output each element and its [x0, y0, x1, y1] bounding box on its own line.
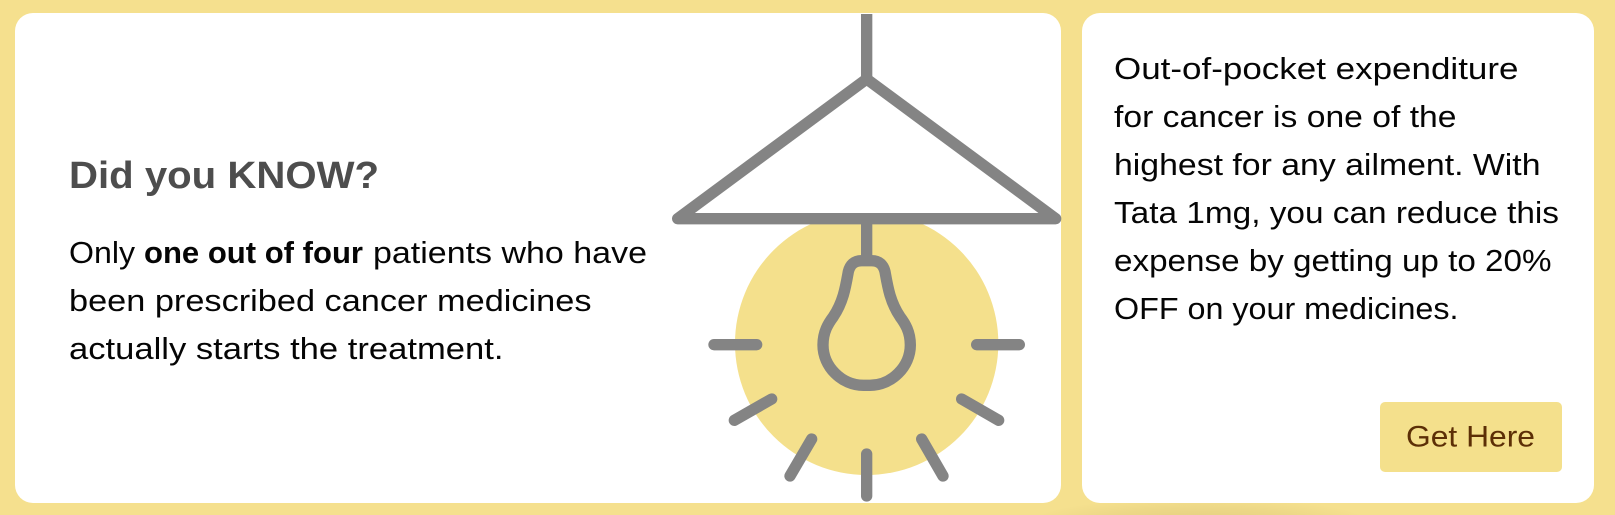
- text block: one out of four fact: patients who have: [373, 235, 647, 270]
- text block: expenditure description: highest for any ailment. With: [1114, 147, 1540, 182]
- text block: one out of four fact: actually starts the treatment.: [69, 331, 504, 366]
- text block: one out of four fact: Only: [69, 235, 136, 270]
- icon: hanging lamp with glowing bulb: [678, 14, 1056, 496]
- button: Get Here: [1380, 402, 1562, 472]
- text block: expenditure description: expense by getting up to 20%: [1114, 243, 1552, 278]
- text block: expenditure description: Tata 1mg, you can reduce this: [1114, 195, 1559, 230]
- lamp shade: [678, 79, 1056, 219]
- bulb neck: [850, 219, 884, 261]
- text block: expenditure description: for cancer is one of the: [1114, 99, 1456, 134]
- lamp cord: [850, 14, 884, 79]
- text block: expenditure description: Out-of-pocket expenditure: [1114, 51, 1518, 86]
- text block: one out of four fact: [69, 235, 647, 366]
- bulb: [823, 261, 910, 385]
- panel: did you know: [15, 13, 1061, 503]
- text block: expenditure description: [1114, 51, 1559, 326]
- glow circle: [735, 212, 998, 475]
- panel: out-of-pocket expenditure: [1082, 13, 1594, 503]
- heading: Did you KNOW?: Did you KNOW?: [69, 155, 379, 197]
- text block: one out of four fact: one out of four: [144, 235, 363, 270]
- text block: expenditure description: OFF on your medicines.: [1114, 291, 1458, 326]
- button: Get Here: Get Here: [1406, 420, 1535, 453]
- light rays: [714, 345, 1019, 496]
- text block: one out of four fact: been prescribed cancer medicines: [69, 283, 592, 318]
